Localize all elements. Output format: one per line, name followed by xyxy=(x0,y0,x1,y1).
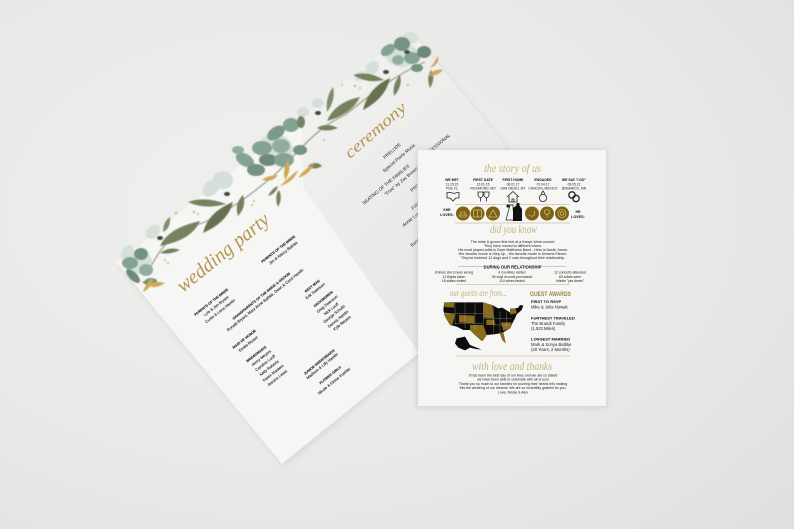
relationship stats: 114 wines tasted xyxy=(499,279,525,283)
us map xyxy=(443,302,523,350)
wedding party names: PARENTS OF THE BRIDE xyxy=(194,287,230,317)
timeline: PCB, FL xyxy=(446,186,458,190)
wedding party names: JUNIOR BRIDESMAIDS xyxy=(303,348,336,376)
eucalyptus leaves xyxy=(122,37,431,285)
timeline: ENGAGED xyxy=(534,178,552,182)
thanks heading: with love and thanks xyxy=(472,359,552,373)
she loves label: SHE xyxy=(443,208,451,212)
guest awards heading: GUEST AWARDS xyxy=(530,291,571,298)
timeline: 12.01.15 xyxy=(477,182,490,186)
wedding party names: Karen Masters xyxy=(262,363,285,383)
did you know facts xyxy=(458,240,568,260)
ceremony program text: "Free" by Zac Brown Band xyxy=(383,158,428,197)
she loves label: LOVES: xyxy=(440,213,454,217)
thanks message: this the wedding of our dreams. We are so incredibly grateful for you. xyxy=(460,386,566,390)
guest awards list: Mark & Sonya Bathke xyxy=(531,342,572,347)
icon: handshake xyxy=(447,192,459,201)
relationship stats: 16 states visited xyxy=(442,279,466,283)
ceremony program text: FIRST xyxy=(410,198,424,211)
timeline: FIRST DATE xyxy=(473,178,494,182)
guest awards list: The Brandt Family xyxy=(531,321,566,326)
wedding party names: FLOWER GIRLS xyxy=(319,365,343,385)
timeline: CANCUN, MEXICO xyxy=(529,186,558,190)
wedding party names: GRANDPARENTS OF THE BRIDE & GROOM xyxy=(232,272,291,321)
ceremony program text: Annie Luoff xyxy=(401,209,423,228)
timeline: 11.15.15 xyxy=(446,182,458,186)
guest awards list xyxy=(531,299,575,352)
wedding party names: Greg Swenson xyxy=(315,294,339,314)
ceremony program text: SEATING OF THE FAMILIES xyxy=(361,163,410,206)
olive leaves xyxy=(142,70,433,286)
ceremony program text: PROCESSIONAL xyxy=(409,165,441,193)
timeline: WE SAY "I DO" xyxy=(562,178,586,182)
relationship heading: DURING OUR RELATIONSHIP xyxy=(484,264,542,270)
he loves label: HE xyxy=(576,210,580,214)
did you know facts: They've fostered 12 dogs and 2 cats throughout their relationship. xyxy=(461,256,565,260)
relationship stats xyxy=(435,270,586,283)
ceremony program text: Special Piano Music xyxy=(382,142,417,173)
wedding party names: Madison & Lilly Hamlin xyxy=(305,352,339,380)
timeline: RICHMOND, MO xyxy=(470,186,496,190)
wedding party names: Nick Luoff xyxy=(323,301,340,316)
wedding party names: BEST MAN xyxy=(304,279,321,294)
wedding party names: George Schultz xyxy=(322,303,346,324)
wedding party names: PARENTS OF THE BRIDE xyxy=(261,234,297,264)
wedding party names: Ronald Bryant, Mary Anne Bathke, Dean & Carol Hamlin xyxy=(226,267,304,332)
did you know facts: They have moved to different towns. xyxy=(484,244,542,248)
relationship stats: Infinite "yes dears" xyxy=(556,279,585,283)
pale background leaves xyxy=(118,32,418,274)
wedding party heading: wedding party xyxy=(172,209,274,297)
wedding party names: Curtis & Lena Hamlin xyxy=(204,298,236,324)
wedding party names: Lois & Jim Bryant xyxy=(203,294,230,317)
thanks message: we have been able to celebrate with all of you! xyxy=(477,378,549,382)
gold leaves xyxy=(143,56,443,292)
alaska xyxy=(455,337,482,350)
timeline icons xyxy=(447,191,579,202)
guest awards list: (40 Years, 2 Months) xyxy=(531,347,570,352)
ceremony program text: PROCESSIONAL xyxy=(420,132,452,160)
wedding party names: Dennis Hamlin xyxy=(327,309,349,329)
wedding party names: Jim & Nancy Bathke xyxy=(268,240,298,266)
wedding party names xyxy=(194,234,352,396)
guests heading: our guests are from... xyxy=(450,288,507,298)
wedding party names: Erik Swenson xyxy=(304,281,326,300)
dividers xyxy=(455,204,570,223)
guest awards list: FURTHEST TRAVELED xyxy=(531,316,575,320)
timeline: SAN DIEGO, MT xyxy=(501,186,525,190)
wedding party names: Jessica Lewis xyxy=(266,368,288,387)
loves icons xyxy=(456,206,569,220)
relationship stats: 12 flights taken xyxy=(443,275,466,279)
wedding party names: Kyle Meyers xyxy=(332,314,352,332)
thanks message xyxy=(459,374,567,394)
relationship heading xyxy=(458,264,566,270)
timeline: 06.01.17 xyxy=(507,182,520,186)
wedding party names: GROOMSMEN xyxy=(313,290,334,308)
relationship stats: 45 vinyl records purchased xyxy=(492,275,532,279)
ceremony heading: ceremony xyxy=(341,99,411,162)
ceremony program text: Band xyxy=(409,237,421,248)
panel: story card xyxy=(418,150,606,406)
wedding party names: BRIDESMAIDS xyxy=(245,345,268,363)
wedding party names: Emilie Bryant xyxy=(238,334,259,353)
guest awards list: FIRST TO RSVP xyxy=(531,299,561,304)
he loves label: LOVES: xyxy=(571,215,585,219)
icon: glasses xyxy=(478,192,489,202)
icon: house xyxy=(507,192,519,202)
guest awards list: Mike & Julia Nowak xyxy=(531,304,568,310)
wedding party names: Caroline Luoff xyxy=(254,353,277,372)
guest awards list: (1,523 Miles) xyxy=(531,326,556,331)
did you know heading: did you know xyxy=(490,222,537,236)
relationship stats: 12 concerts attended xyxy=(554,270,586,274)
relationship stats: 4 countries visited xyxy=(498,270,526,274)
icon: couple xyxy=(506,203,522,221)
panel: ceremony page xyxy=(302,30,506,352)
timeline: BISMARCK, MN xyxy=(562,186,587,190)
timeline: WE MET xyxy=(445,178,460,182)
did you know facts: The bride & groom first met at a Kanye West concert. xyxy=(471,240,555,244)
timeline: FIRST HOME xyxy=(503,178,524,182)
did you know facts: Her favorite movie is Step Up - His favorite movie is Dreams Eleven. xyxy=(459,252,567,256)
did you know facts: His most played artist is Dave Matthews Band - Hers is Norah Jones. xyxy=(458,248,568,252)
ceremony program text: PRELUDE xyxy=(382,142,402,160)
card shadow xyxy=(416,149,607,408)
panel: wedding party page xyxy=(117,116,419,464)
timeline: 07.04.17 xyxy=(537,182,550,186)
wedding party names: Kelly Roberts xyxy=(258,359,280,377)
icon: ring xyxy=(539,191,547,202)
timeline: 09.05.21 xyxy=(568,182,581,186)
timeline xyxy=(445,178,587,190)
gold sprinkles xyxy=(164,84,409,264)
booklet shadow xyxy=(119,33,508,467)
guest awards list: LONGEST MARRIED xyxy=(531,336,570,342)
thanks message: Love, Nicole & Alex xyxy=(498,390,528,394)
thanks message: Thank you so much to our families for pouring their hearts into making xyxy=(459,382,567,386)
ceremony program text xyxy=(361,132,452,248)
wedding party names: MAID OF HONOR xyxy=(232,328,257,350)
floral band xyxy=(118,32,443,292)
dark buds xyxy=(157,50,410,240)
relationship stats: 63 artists seen xyxy=(559,275,581,279)
relationship stats: 8 times she's been wrong xyxy=(435,270,473,274)
story heading: the story of us xyxy=(484,161,541,175)
thanks message: It has been the best day of our lives and we are so stated xyxy=(469,374,557,378)
icon: wedding bands xyxy=(569,192,579,202)
wedding party names: Jenny Meyers xyxy=(250,348,272,367)
wedding party names: Nicole & Eloise Koehler xyxy=(317,366,352,396)
stems xyxy=(150,62,425,268)
